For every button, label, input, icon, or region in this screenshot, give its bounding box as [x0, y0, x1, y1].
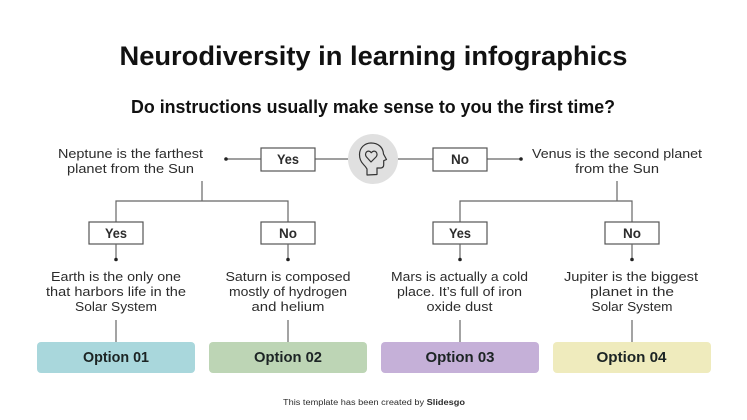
column 2: mostly of hydrogen — [229, 284, 347, 299]
column 1: that harbors life in the — [46, 284, 186, 299]
column 3: oxide dust — [426, 299, 493, 314]
Neptune text: Neptune is the farthest — [58, 146, 203, 161]
column 2: No — [279, 226, 297, 241]
column 4 — [553, 222, 711, 373]
subtitle question: Do instructions usually make sense to you the first time? — [131, 97, 615, 117]
column 2 — [209, 222, 367, 373]
right connector — [460, 181, 632, 222]
title: Neurodiversity in learning infographics — [120, 41, 628, 71]
column 4: No — [623, 226, 641, 241]
column 2: Option 02 — [254, 349, 322, 366]
column 3: place. It’s full of iron — [397, 284, 522, 299]
column 1 — [37, 222, 195, 373]
column 2: Saturn is composed — [226, 269, 350, 284]
column 3 — [381, 222, 539, 373]
top left branch: Yes: Yes — [277, 152, 299, 167]
Venus text: from the Sun — [575, 161, 659, 176]
top left branch: Yes — [224, 148, 348, 171]
Venus text: Venus is the second planet — [532, 146, 702, 161]
top right branch: No: No — [451, 152, 469, 167]
Neptune text: planet from the Sun — [67, 161, 194, 176]
column 3: Yes — [449, 226, 471, 241]
column 1: Option 01 — [83, 349, 149, 366]
column 4: Option 04 — [596, 349, 667, 366]
Venus text — [532, 146, 702, 176]
column 1: Earth is the only one — [51, 269, 181, 284]
Neptune text — [58, 146, 203, 176]
column 4: Jupiter is the biggest — [564, 269, 698, 284]
column 4: planet in the — [590, 284, 674, 299]
central head icon — [348, 134, 398, 184]
top right branch: No — [398, 148, 523, 171]
column 1: Yes — [105, 226, 127, 241]
left connector — [116, 181, 288, 222]
column 4: Solar System — [592, 299, 672, 314]
column 3: Mars is actually a cold — [391, 269, 528, 284]
column 2: and helium — [252, 299, 324, 314]
footer credit: This template has been created by Slidesgo — [283, 398, 465, 407]
column 3: Option 03 — [426, 349, 494, 366]
column 1: Solar System — [75, 299, 157, 314]
